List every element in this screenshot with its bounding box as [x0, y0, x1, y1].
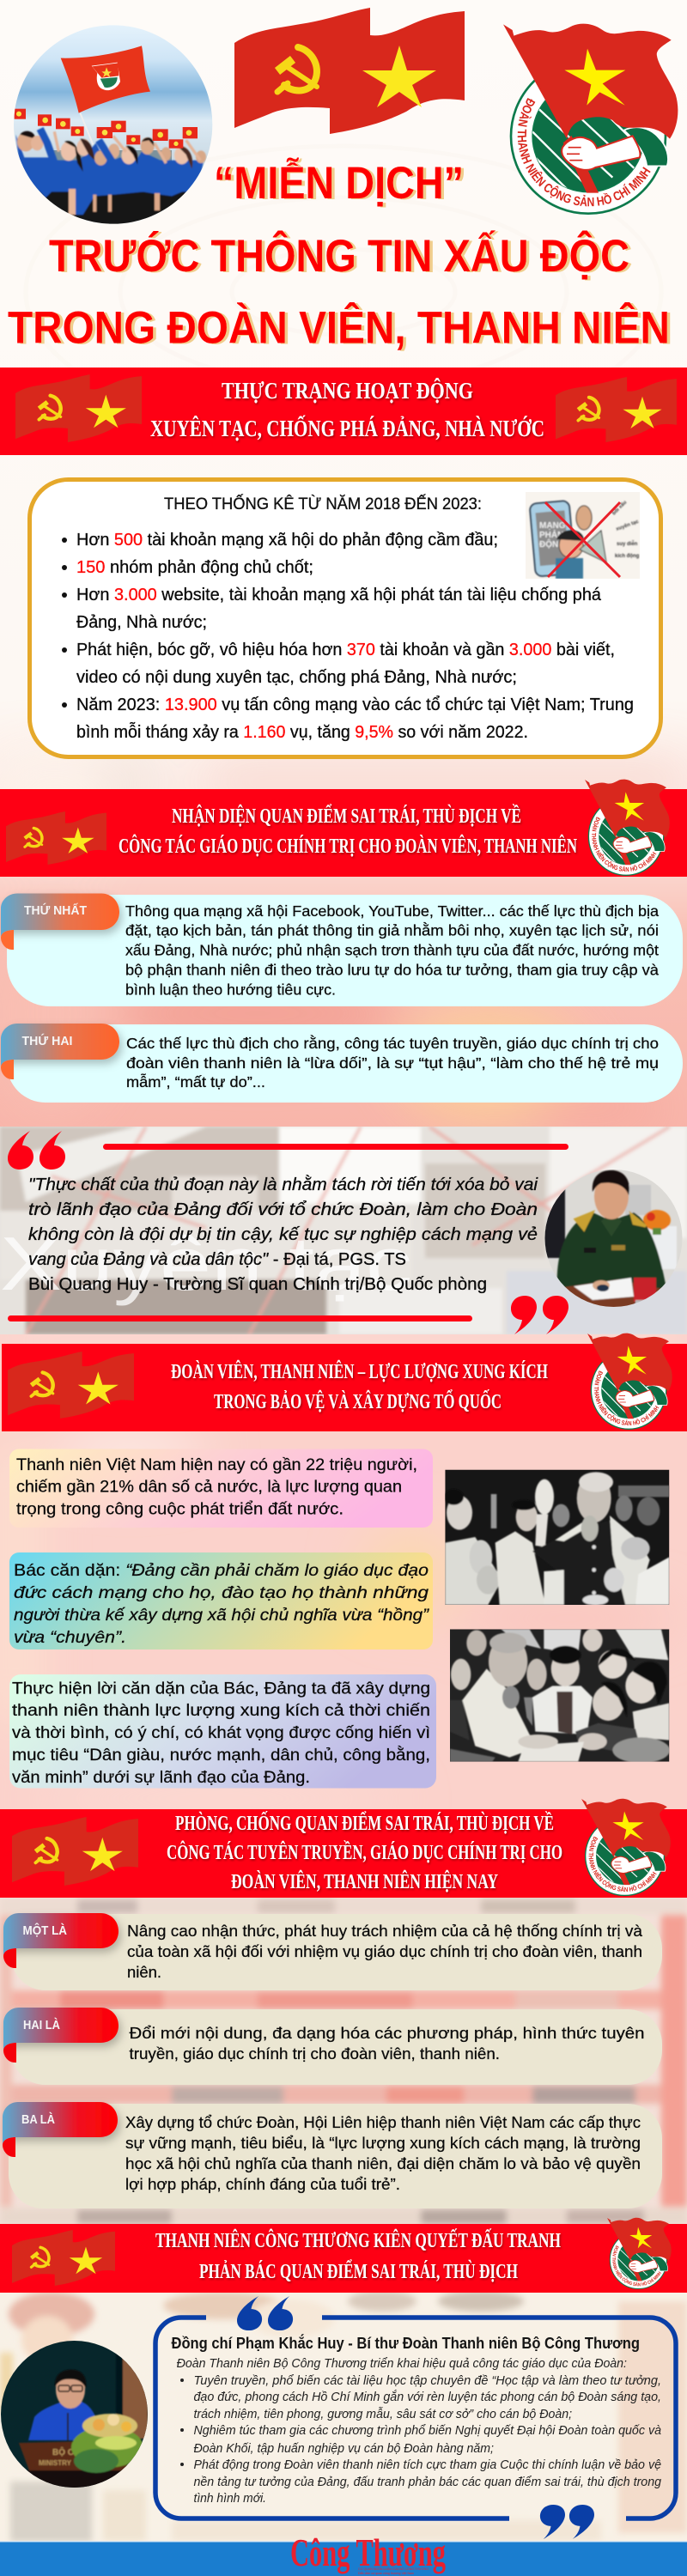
statement text: Nghiêm túc tham gia các chương trình phổ biến Nghị quyết Đại hội Đoàn toàn quốc và — [194, 2423, 661, 2438]
statistics bullet list: Phát hiện, bóc gỡ, vô hiệu hóa hơn 370 tài khoản và gần 3.000 bài viết, — [76, 641, 615, 659]
tag: Thứ hai: THỨ HAI — [22, 1033, 72, 1048]
panel: statistics 2018-2023 — [29, 479, 661, 757]
statistics bullet list: Đảng, Nhà nước; — [76, 613, 207, 632]
statistics bullet list: Hơn 500 tài khoản mạng xã hội do phản động cầm đầu; — [76, 531, 498, 550]
Youth Union emblem: ĐOÀN THANH NIÊN CỘNG SẢN HỒ CHÍ MINH — [517, 98, 651, 206]
illustration: anti fake-news cartoon: kích động — [615, 554, 640, 559]
tag: Ba là — [3, 2102, 118, 2157]
statement text: Đoàn Thanh niên Bộ Công Thương triển khai hiệu quả công tác giáo dục của Đoàn: — [177, 2356, 627, 2371]
banner: prevention and combat: ĐOÀN VIÊN, THANH NIÊN HIỆN NAY — [231, 1870, 498, 1893]
tag: Ba là: BA LÀ — [21, 2112, 55, 2127]
title — [8, 156, 670, 354]
statistics bullet list: 150 nhóm phản động chủ chốt; — [76, 558, 313, 577]
banner: current situation: THỰC TRẠNG HOẠT ĐỘNG — [222, 378, 473, 404]
illustration: anti fake-news cartoon — [526, 492, 640, 579]
text block: mẫm”, “mất tự do”... — [126, 1072, 265, 1091]
box: Party's implementation — [9, 1674, 436, 1788]
panel: expert quote — [0, 1127, 687, 1334]
box: youth population: trọng trong công cuộc phát triển đất nước. — [16, 1501, 344, 1518]
box: youth population: Thanh niên Việt Nam hiện nay có gần 22 triệu người, — [16, 1456, 417, 1474]
illustration: anti fake-news cartoon: suy diễn — [617, 541, 638, 547]
text block — [129, 2024, 644, 2063]
party flag — [234, 8, 465, 134]
text block: bộ phận thanh niên đi theo trào lưu tự do hóa tư tưởng, tham gia truy cập và — [125, 962, 659, 979]
tag: Thứ hai — [1, 1024, 119, 1079]
illustration: anti fake-news cartoon: ĐỘNG — [539, 538, 565, 550]
banner: current situation — [0, 368, 687, 455]
text block: Nâng cao nhận thức, phát huy trách nhiệm của cả hệ thống chính trị và — [127, 1922, 643, 1940]
statement heading: Đồng chí Phạm Khắc Huy - Bí thư Đoàn Thanh niên Bộ Công Thương — [172, 2334, 640, 2352]
banner: vanguard force: TRONG BẢO VỆ VÀ XÂY DỰNG TỔ QUỐC — [214, 1390, 502, 1413]
statement text: tình hình mới. — [194, 2491, 266, 2506]
box: Party's implementation: và thời bình, có ý chí, có khát vọng được cống hiến vì — [12, 1724, 430, 1742]
box: Uncle Ho's advice: Bác căn dặn: “Đảng cần phải chăm lo giáo dục đạo — [14, 1562, 429, 1580]
banner: identifying false views — [0, 780, 687, 877]
text block: niên. — [127, 1963, 161, 1981]
text block — [125, 902, 659, 998]
tag: Thứ nhất — [1, 893, 119, 950]
text block: đoàn viên thanh niên là “lừa dối”, là sự “tụt hậu”, “làm cho thế hệ trẻ mụ — [126, 1054, 659, 1072]
text block: truyền, giáo dục chính trị cho đoàn viên, thanh niên. — [129, 2044, 500, 2063]
text block: xấu Đảng, Nhà nước; phủ nhận sạch trơn thành tựu của đất nước, hướng một — [125, 941, 659, 958]
quote text: "Thực chất của thủ đoạn này là nhằm tách rời tiến tới xóa bỏ vai — [28, 1175, 538, 1194]
box: Party's implementation: thanh niên thành lực lượng xung kích cả thời chiến — [12, 1702, 430, 1720]
footer: Công Thương masthead — [0, 2530, 687, 2576]
statement text — [177, 2356, 662, 2506]
card: second point — [1, 1024, 683, 1103]
box: Uncle Ho's advice: vừa “chuyên”. — [14, 1629, 126, 1647]
card: measure three — [3, 2102, 662, 2208]
box: Uncle Ho's advice — [9, 1552, 433, 1649]
tag: Hai là — [3, 2008, 119, 2063]
footer: Công Thương masthead: Công Thương — [290, 2530, 446, 2574]
closing quote mark — [511, 1296, 568, 1334]
illustration: anti fake-news cartoon: PHẢN — [539, 529, 563, 540]
closing quote mark — [540, 2505, 594, 2539]
quote text: vang của Đảng và của dân tộc" - Đại tá, PGS. TS — [28, 1249, 406, 1269]
banner: prevention and combat: ĐOÀN THANH NIÊN CỘNG SẢN HỒ CHÍ MINH — [589, 1836, 656, 1893]
statement text: đạo đức, phong cách Hồ Chí Minh gắn với rèn luyện tác phong cán bộ Đoàn sáng tạo, — [194, 2390, 661, 2404]
statement text: nền tảng tư tưởng của Đảng, đấu tranh phản bác các quan điểm sai trái, thù địch trong — [194, 2475, 662, 2489]
opening quote mark — [8, 1131, 65, 1170]
tag: Một là: MỘT LÀ — [22, 1923, 67, 1938]
banner: identifying false views: NHẬN DIỆN QUAN ĐIỂM SAI TRÁI, THÙ ĐỊCH VỀ — [172, 805, 521, 828]
text block — [126, 1034, 659, 1091]
tag: Thứ nhất: THỨ NHẤT — [24, 902, 87, 918]
title: TRƯỚC THÔNG TIN XẤU ĐỘC — [49, 229, 629, 282]
banner: Industry and Trade youth — [0, 2217, 687, 2293]
banner: prevention and combat — [0, 1798, 687, 1898]
bottom rule — [8, 1315, 472, 1321]
statistics bullet list: bình mỗi tháng xảy ra 1.160 vụ, tăng 9,5% so với năm 2022. — [76, 722, 528, 742]
box: Party's implementation: văn minh” dưới sự lãnh đạo của Đảng. — [12, 1769, 310, 1787]
photo: Phạm Khắc Huy at the podium: BỘ C — [52, 2446, 74, 2458]
box: Uncle Ho's advice: người thừa kế xây dựng xã hội chủ nghĩa vừa “hồng” — [14, 1607, 430, 1625]
photo: colonel portrait — [544, 1170, 682, 1307]
illustration: anti fake-news cartoon: bôi xấu — [611, 499, 629, 516]
statistics heading: THEO THỐNG KÊ TỪ NĂM 2018 ĐẾN 2023: — [164, 493, 482, 513]
statement text: trách nhiệm, tiên phong, gương mẫu, sâu sát cơ sở” cho cán bộ Đoàn; — [194, 2407, 572, 2421]
text block: Thông qua mạng xã hội Facebook, YouTube, Twitter... các thế lực thù địch bịa — [125, 902, 659, 920]
box: Party's implementation: Thực hiện lời căn dặn của Bác, Đảng ta đã xây dựng — [12, 1680, 430, 1698]
text block — [127, 1922, 643, 1981]
text block: Đổi mới nội dung, đa dạng hóa các phương pháp, hình thức tuyên — [129, 2024, 644, 2042]
quote text: Bùi Quang Huy - Trường Sĩ quan Chính trị/Bộ Quốc phòng — [28, 1274, 487, 1294]
text block: bình luận theo hướng tiêu cực. — [125, 981, 336, 998]
photo: Uncle Ho with children — [450, 1629, 670, 1763]
top rule — [103, 1144, 568, 1150]
text block: đặt, tạo kịch bản, tán phát thông tin giả nhằm bôi nhọ, xuyên tạc lịch sử, nói — [125, 920, 659, 939]
statistics bullet list: Năm 2023: 13.900 vụ tấn công mạng vào các tổ chức tại Việt Nam; Trung — [76, 696, 634, 714]
box: Uncle Ho's advice: đức cách mạng cho họ, đào tạo họ thành những — [14, 1584, 429, 1602]
statistics bullet list: Hơn 3.000 website, tài khoản mạng xã hội phát tán tài liệu chống phá — [76, 586, 602, 605]
box: youth population: chiếm gần 21% dân số cả nước, là lực lượng quan — [16, 1479, 402, 1496]
banner: Industry and Trade youth: PHẢN BÁC QUAN ĐIỂM SAI TRÁI, THÙ ĐỊCH — [199, 2260, 518, 2283]
card: first point — [1, 893, 683, 1006]
panel: secretary's statement — [155, 2296, 676, 2539]
text block: sự vững mạnh, tiêu biểu, là “lực lượng xung kích cách mạng, là trường — [125, 2134, 641, 2152]
tag: Hai là: HAI LÀ — [23, 2018, 60, 2032]
illustration: anti fake-news cartoon: xuyên tạc — [616, 519, 640, 532]
photo: Phạm Khắc Huy at the podium — [0, 2340, 150, 2492]
card: measure two — [3, 2008, 662, 2085]
quote text: không còn là đội dự bị tin cậy, kế tục sự nghiệp cách mạng vẻ — [28, 1224, 538, 1244]
box: Party's implementation: mục tiêu “Dân giàu, nước mạnh, dân chủ, công bằng, — [12, 1746, 430, 1765]
title: “MIỄN DỊCH” — [214, 156, 464, 209]
statement text: Phát động trong Đoàn viên thanh niên tích cực tham gia Cuộc thi chính luận về bảo vệ — [194, 2458, 661, 2472]
photo: Uncle Ho waving — [444, 1470, 669, 1605]
banner: vanguard force: ĐOÀN THANH NIÊN CỘNG SẢN HỒ CHÍ MINH — [594, 1370, 660, 1425]
statement text: Tuyên truyền, phổ biến các tài liệu học tập chuyên đề “Học tập và làm theo tư tưởng, — [194, 2373, 661, 2388]
opening quote mark — [237, 2296, 293, 2330]
statement text: Đoàn Khối, tập huấn nghiệp vụ cán bộ Đoàn hàng năm; — [194, 2441, 494, 2456]
photo: youth group with flags — [11, 23, 215, 226]
footer: Công Thương masthead: CƠ QUAN NGÔN LUẬN CỦA BỘ CÔNG THƯƠNG — [358, 2567, 429, 2571]
illustration: anti fake-news cartoon: MẠNG — [539, 521, 566, 531]
text block: của toàn xã hội đối với nhiệm vụ giáo dục chính trị cho đoàn viên, thanh — [127, 1942, 642, 1960]
blue frame — [155, 2318, 676, 2518]
banner: Industry and Trade youth: ĐOÀN THANH NIÊN CỘNG SẢN HỒ CHÍ MINH — [612, 2245, 661, 2286]
quote background collage — [0, 1127, 687, 1334]
statistics bullet list: video có nội dung xuyên tạc, chống phá Đảng, Nhà nước; — [76, 668, 517, 687]
banner: identifying false views: ĐOÀN THANH NIÊN CỘNG SẢN HỒ CHÍ MINH — [592, 817, 656, 872]
statistics bullet list — [62, 531, 634, 742]
card: measure one — [3, 1913, 662, 1990]
text block: học xã hội chủ nghĩa của thanh niên, đại diện chăm lo và bảo vệ quyền — [125, 2154, 641, 2172]
text block: Các thế lực thù địch cho rằng, công tác tuyên truyền, giáo dục chính trị cho — [126, 1034, 659, 1052]
banner: current situation: XUYÊN TẠC, CHỐNG PHÁ ĐẢNG, NHÀ NƯỚC — [150, 415, 544, 441]
photo: Phạm Khắc Huy at the podium: MINISTRY — [39, 2459, 72, 2467]
quote text: trò lãnh đạo của Đảng đối với tổ chức Đoàn, làm cho Đoàn — [28, 1200, 538, 1219]
footer: Công Thương masthead: Diễn đàn cơ quan công thương Việt Nam — [358, 2571, 415, 2575]
quote text — [28, 1175, 538, 1294]
text block: lợi hợp pháp, chính đáng của tuổi trẻ”. — [125, 2175, 400, 2193]
banner: vanguard force — [2, 1333, 687, 1431]
watermark word: Xuyên tạc — [0, 1221, 412, 1306]
tag: Một là — [3, 1913, 119, 1968]
Youth Union emblem — [503, 24, 678, 215]
text block — [125, 2113, 641, 2193]
box: youth population — [9, 1449, 433, 1528]
text block: Xây dựng tổ chức Đoàn, Hội Liên hiệp thanh niên Việt Nam các cấp thực — [125, 2113, 641, 2131]
